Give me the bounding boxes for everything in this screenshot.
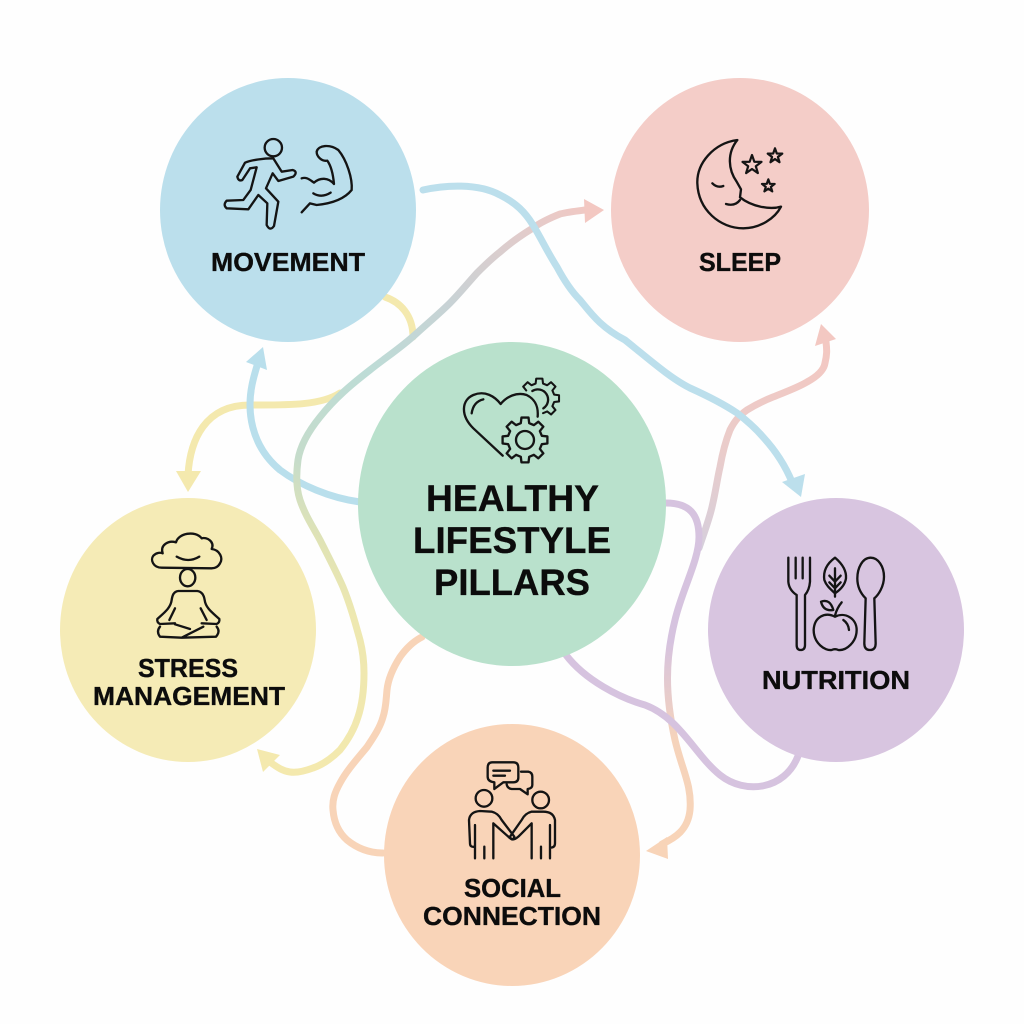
label: stress management: MANAGEMENT <box>93 681 285 711</box>
label: stress management: STRESS <box>138 653 238 683</box>
label: social connection <box>423 873 601 931</box>
arrow: nutrition to sleep <box>699 324 836 548</box>
icon: two people with speech bubbles <box>469 762 555 858</box>
label: movement: MOVEMENT <box>211 247 365 277</box>
arrow: movement to nutrition <box>423 186 805 497</box>
title: healthy lifestyle pillars: PILLARS <box>434 562 590 603</box>
title: healthy lifestyle pillars: HEALTHY <box>426 478 599 519</box>
arrow: movement to stress management <box>176 297 413 492</box>
label: social connection: CONNECTION <box>423 901 601 931</box>
label: social connection: SOCIAL <box>464 873 561 903</box>
arrow: center to social connection <box>646 503 699 859</box>
panel: nutrition <box>708 498 964 762</box>
panel: healthy lifestyle pillars <box>358 342 666 666</box>
icon: fork, leaf, apple and spoon <box>788 558 884 650</box>
label: sleep: SLEEP <box>699 247 781 277</box>
label: nutrition: NUTRITION <box>762 665 910 695</box>
arrow: center to movement <box>246 347 360 502</box>
icon: runner and muscle arm <box>225 139 352 229</box>
label: stress management <box>93 653 285 711</box>
connector: center to social connection <box>333 637 422 853</box>
panel: stress management <box>60 498 316 762</box>
title: healthy lifestyle pillars <box>413 478 611 603</box>
icon: heart and gears <box>464 379 559 462</box>
arrow: stress management to sleep <box>257 199 604 772</box>
panel: social connection <box>384 724 640 986</box>
icon: moon and stars <box>697 140 782 228</box>
title: healthy lifestyle pillars: LIFESTYLE <box>413 520 611 561</box>
connector: center to nutrition <box>566 655 798 787</box>
panel: sleep <box>611 78 869 342</box>
panel: movement <box>160 78 416 342</box>
icon: meditating person under cloud <box>152 534 221 638</box>
